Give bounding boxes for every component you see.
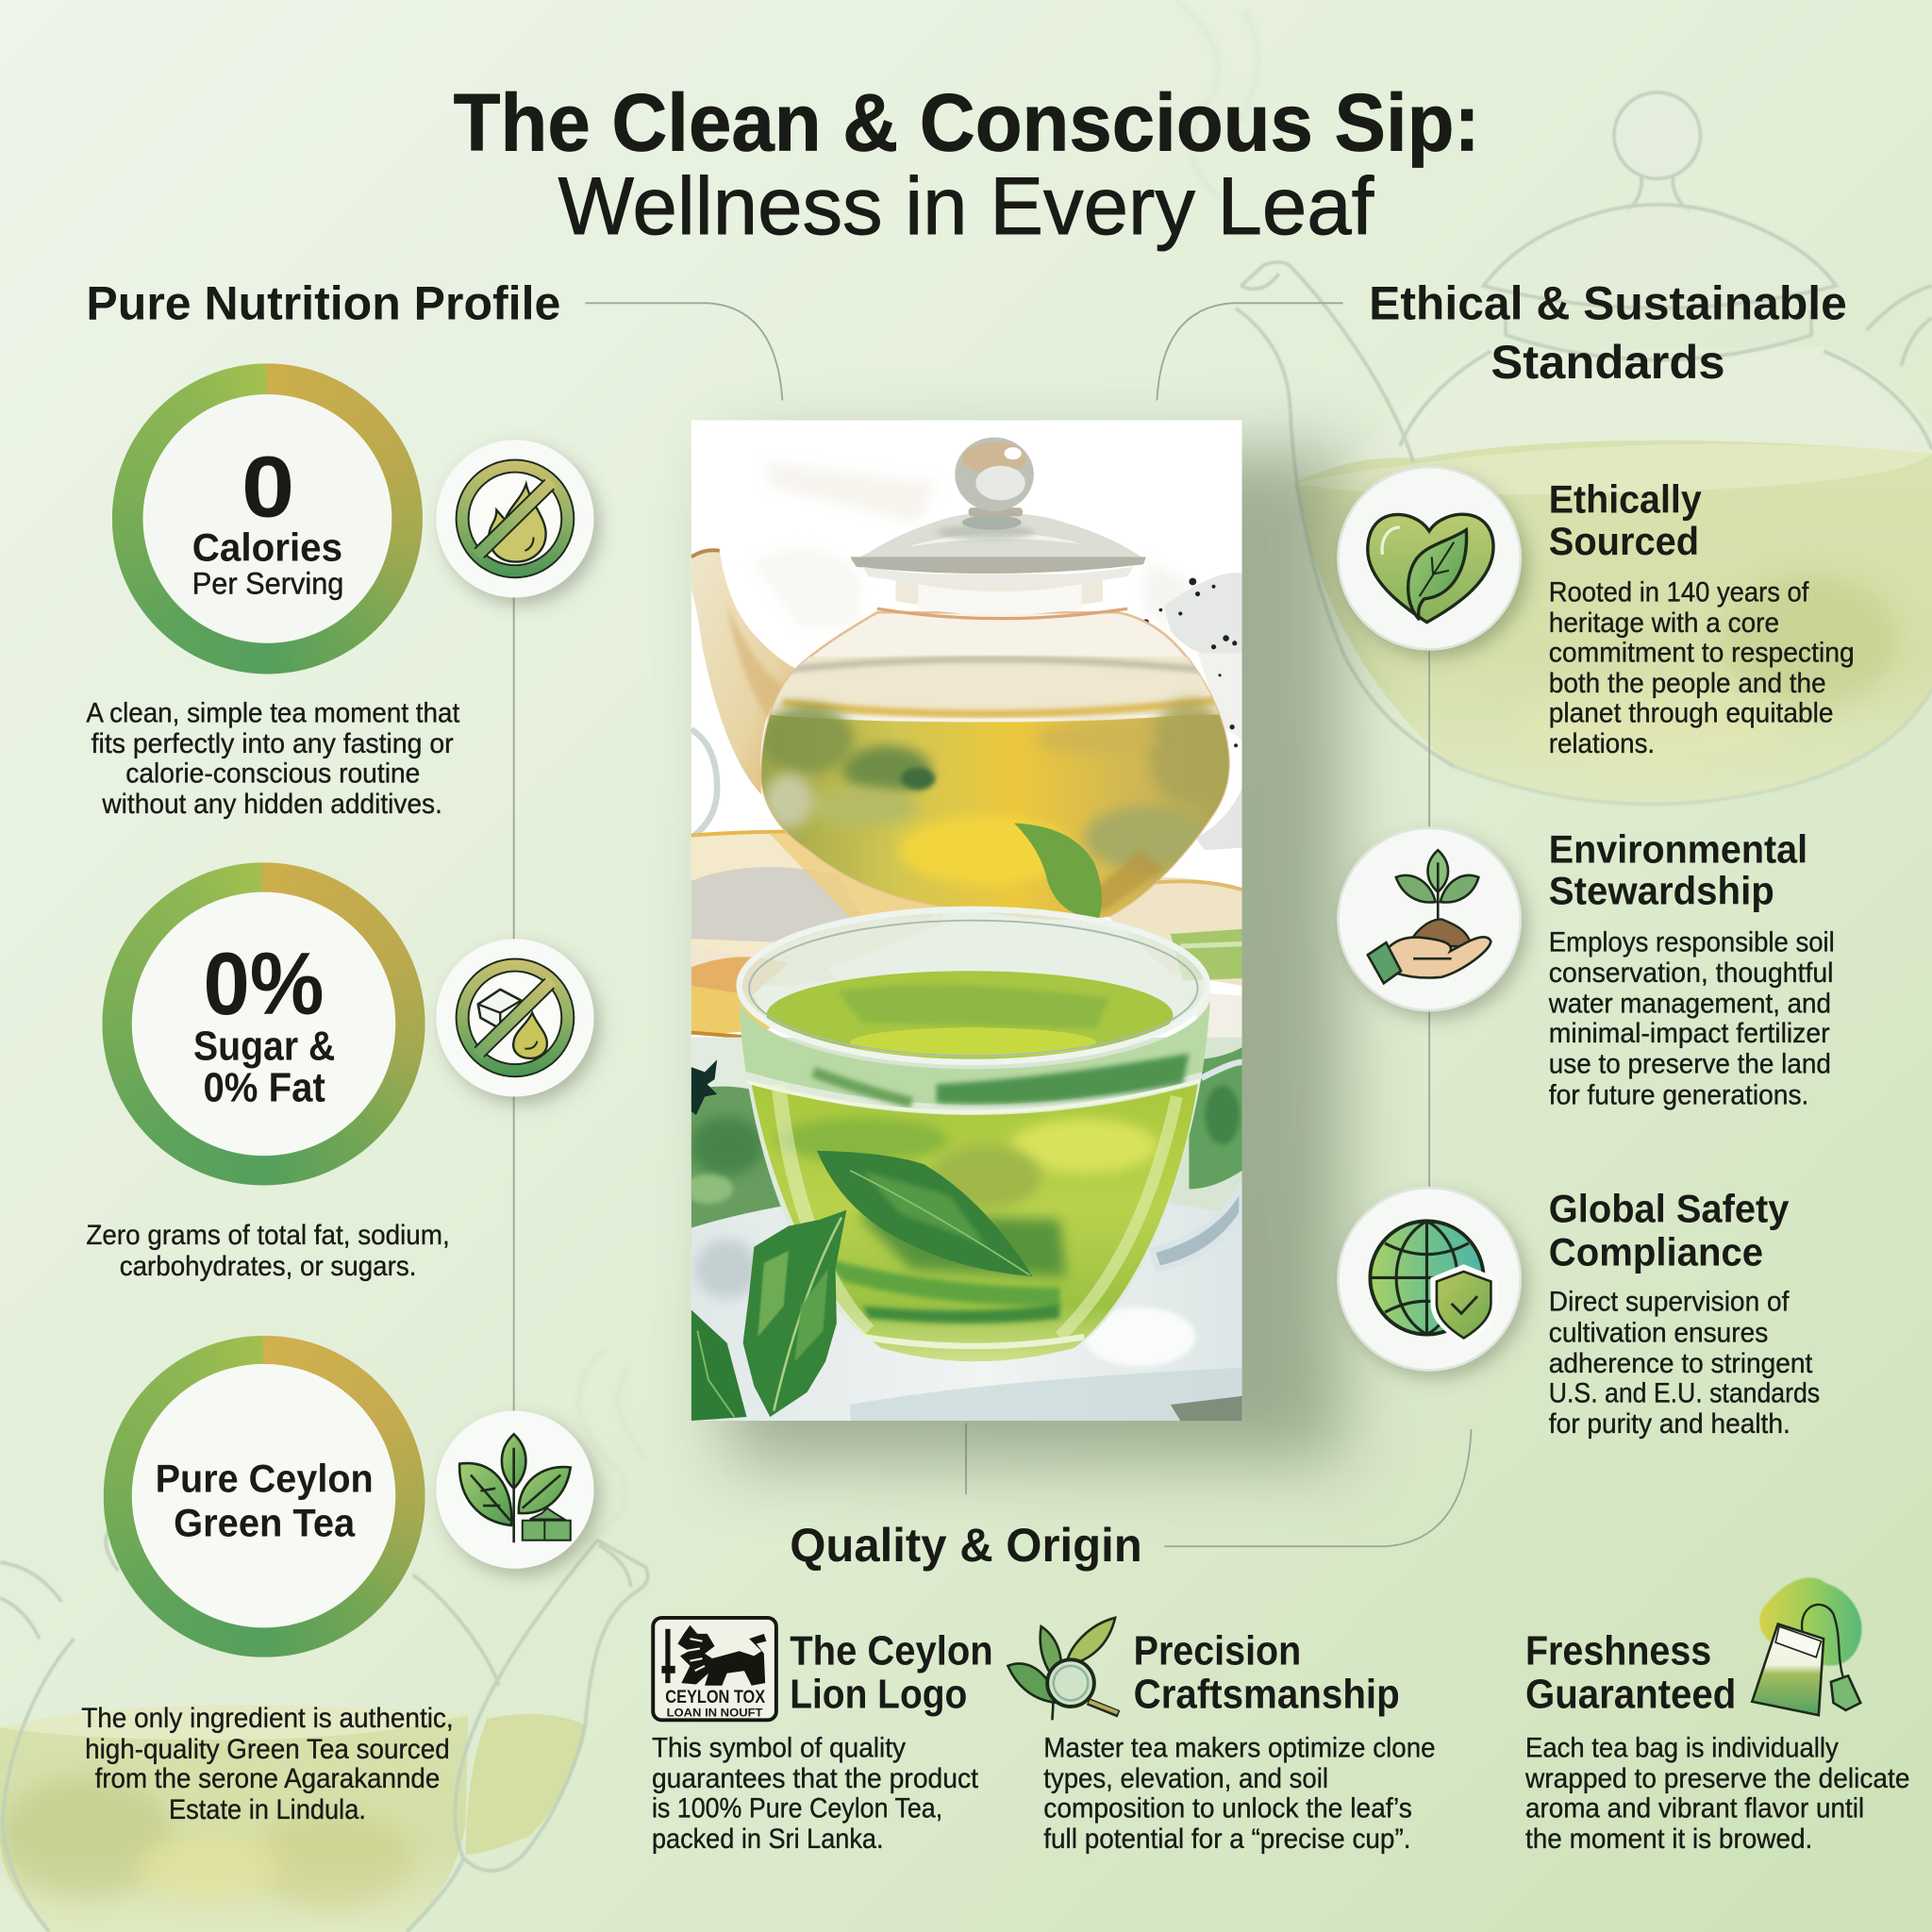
- text: ethically sourced: both the people and the: [1549, 668, 1826, 699]
- icon: Ceylon lion logo: [653, 1618, 776, 1720]
- stat ring: 0 calories: Calories: [192, 525, 342, 569]
- stat ring: 0% sugar and fat: [102, 862, 425, 1185]
- text: precision craftsmanship: composition to unlock the leaf’s: [1043, 1793, 1412, 1824]
- description: calories: without any hidden additives.: [101, 789, 442, 820]
- text: global safety compliance: [1549, 1187, 1820, 1440]
- connector lines: [514, 303, 1472, 1546]
- text: freshness guaranteed: Each tea bag is individually: [1525, 1733, 1839, 1764]
- button icon: heart with leaf: [1338, 467, 1521, 649]
- teapot right handle: [1164, 573, 1242, 850]
- text: global safety compliance: for purity and health.: [1549, 1408, 1790, 1440]
- button icon: hand holding plant: [1338, 828, 1521, 1010]
- stat ring: 0 calories: Per Serving: [192, 567, 343, 601]
- button icon: globe with shield: [1338, 1188, 1521, 1370]
- description: calories: calorie-conscious routine: [125, 758, 420, 789]
- stat ring: pure Ceylon green tea: Green Tea: [174, 1501, 356, 1545]
- landscape behind cup: [684, 1038, 1242, 1247]
- text: environmental stewardship: [1548, 826, 1835, 1110]
- text: freshness guaranteed: wrapped to preserve the delicate: [1524, 1763, 1909, 1794]
- text: freshness guaranteed: Freshness: [1525, 1629, 1711, 1674]
- title: Wellness in Every Leaf: [558, 161, 1374, 252]
- description: sugar and fat: Zero grams of total fat, sodium,: [86, 1220, 450, 1251]
- teapot spout: [691, 550, 801, 794]
- heading: Quality & Origin: Quality & Origin: [790, 1519, 1142, 1572]
- text: the Ceylon lion logo: Lion Logo: [790, 1672, 967, 1717]
- stat ring: pure Ceylon green tea: Pure Ceylon: [156, 1457, 374, 1501]
- saucer under cup: [542, 1189, 1429, 1497]
- text: precision craftsmanship: Craftsmanship: [1134, 1672, 1400, 1717]
- icon: Ceylon lion logo: CEYLON TOX: [665, 1688, 765, 1707]
- description: pure Ceylon: high-quality Green Tea sourced: [85, 1734, 450, 1765]
- text: ethically sourced: commitment to respecting: [1549, 637, 1855, 668]
- text: global safety compliance: Compliance: [1549, 1229, 1763, 1274]
- stat ring: 0% sugar and fat: 0% Fat: [204, 1066, 325, 1111]
- background watercolor teapot, top right: [1236, 92, 1932, 804]
- text: precision craftsmanship: Master tea makers optimize clone: [1043, 1733, 1436, 1764]
- leaf inside the cup: [817, 1151, 1033, 1276]
- button icon: no sugar, no fat: [436, 939, 594, 1096]
- description: pure Ceylon: Estate in Lindula.: [169, 1794, 366, 1825]
- description: pure Ceylon: The only ingredient is authentic,: [81, 1703, 454, 1734]
- brush wash behind teapot: [752, 462, 1195, 628]
- text: global safety compliance: cultivation ensures: [1549, 1317, 1768, 1348]
- text: global safety compliance: Global Safety: [1549, 1187, 1790, 1231]
- description: sugar and fat: [86, 1220, 450, 1282]
- heading: Ethical & Sustainable Standards: [1369, 276, 1847, 389]
- text: freshness guaranteed: Guaranteed: [1525, 1672, 1736, 1717]
- text: precision craftsmanship: full potential for a “precise cup”.: [1043, 1824, 1411, 1855]
- title: [454, 77, 1480, 252]
- icon: Ceylon lion logo: LOAN IN NOUFT: [667, 1706, 763, 1719]
- text: global safety compliance: U.S. and E.U. standards: [1549, 1377, 1820, 1408]
- description: sugar and fat: carbohydrates, or sugars.: [120, 1251, 416, 1282]
- text: environmental stewardship: Environmental: [1549, 826, 1807, 871]
- description: calories: fits perfectly into any fasting or: [92, 728, 454, 759]
- text: ethically sourced: relations.: [1549, 728, 1655, 759]
- button icon: tea leaves and box: [436, 1411, 594, 1569]
- text: the Ceylon lion logo: The Ceylon: [790, 1629, 993, 1674]
- text: the Ceylon lion logo: This symbol of quality: [652, 1733, 906, 1764]
- heading: Pure Nutrition Profile: Pure Nutrition Profile: [86, 276, 560, 329]
- text: environmental stewardship: conservation, thoughtful: [1549, 958, 1834, 989]
- description: calories: [86, 697, 459, 820]
- text: global safety compliance: adherence to stringent: [1549, 1348, 1812, 1379]
- small left cup handle: [691, 729, 717, 838]
- cup of green tea: [737, 907, 1210, 1361]
- text: precision craftsmanship: types, elevation, and soil: [1043, 1763, 1328, 1794]
- teapot leaf: [1014, 823, 1102, 918]
- text: the Ceylon lion logo: guarantees that the product: [652, 1763, 978, 1794]
- stat ring: 0% sugar and fat: Sugar &: [193, 1024, 335, 1069]
- stat ring: 0% sugar and fat: 0%: [204, 934, 325, 1033]
- teapot glass body: [761, 612, 1229, 919]
- stat ring: 0 calories: 0: [242, 439, 294, 535]
- text: ethically sourced: planet through equitable: [1549, 697, 1834, 728]
- description: calories: A clean, simple tea moment that: [86, 697, 459, 728]
- icon: leaves and magnifying glass: [1008, 1618, 1119, 1720]
- stat ring: 0 calories: [112, 363, 423, 674]
- text: global safety compliance: Direct supervision of: [1549, 1287, 1790, 1318]
- title: The Clean & Conscious Sip:: [454, 77, 1480, 168]
- splatter dots: [1142, 578, 1238, 747]
- text: freshness guaranteed: aroma and vibrant flavor until: [1525, 1793, 1864, 1824]
- teapot lid and knob: [850, 438, 1146, 619]
- text: the Ceylon lion logo: packed in Sri Lanka.: [652, 1824, 883, 1855]
- text: ethically sourced: [1549, 476, 1855, 759]
- text: precision craftsmanship: [1043, 1629, 1436, 1855]
- saucer left and orange tones: [691, 830, 942, 1038]
- text: environmental stewardship: Stewardship: [1549, 869, 1774, 913]
- description: pure Ceylon: [81, 1703, 454, 1825]
- cup glass handle: [1152, 1062, 1242, 1269]
- rim of the cup: [740, 909, 1208, 1062]
- text: ethically sourced: Ethically: [1549, 476, 1702, 521]
- button icon: no calories flame: [436, 440, 594, 597]
- text: environmental stewardship: Employs responsible soil: [1549, 926, 1835, 958]
- card shadow: [727, 451, 1343, 1461]
- central illustration card: teapot and cup of green tea: [691, 421, 1242, 1421]
- text: ethically sourced: Sourced: [1549, 519, 1699, 563]
- background steam wisps: [579, 0, 1258, 1541]
- text: precision craftsmanship: Precision: [1134, 1629, 1301, 1674]
- icon: tea bag with color splash: [1752, 1577, 1862, 1715]
- saucer right and green bar: [1103, 877, 1242, 1047]
- text: freshness guaranteed: the moment it is browed.: [1525, 1824, 1812, 1855]
- stat ring: pure Ceylon green tea: [104, 1336, 425, 1657]
- text: ethically sourced: heritage with a core: [1549, 608, 1779, 639]
- text: environmental stewardship: minimal-impact fertilizer: [1549, 1018, 1830, 1049]
- front tea leaves: [691, 1210, 846, 1421]
- text: ethically sourced: Rooted in 140 years of: [1549, 576, 1809, 608]
- heading: Ethical & Sustainable Standards: Standards: [1491, 336, 1725, 389]
- heading: Ethical & Sustainable Standards: Ethical & Sustainable: [1369, 276, 1847, 329]
- background watercolor teapot, bottom left: [0, 1524, 648, 1932]
- text: the Ceylon lion logo: is 100% Pure Ceylon Tea,: [652, 1793, 942, 1824]
- text: freshness guaranteed: [1524, 1629, 1909, 1855]
- text: environmental stewardship: use to preserve the land: [1549, 1049, 1831, 1080]
- text: environmental stewardship: for future generations.: [1549, 1079, 1808, 1110]
- teapot liquid: [752, 657, 1239, 937]
- description: pure Ceylon: from the serone Agarakannde: [95, 1763, 440, 1794]
- text: environmental stewardship: water management, and: [1548, 989, 1831, 1020]
- text: the Ceylon lion logo: [652, 1629, 993, 1855]
